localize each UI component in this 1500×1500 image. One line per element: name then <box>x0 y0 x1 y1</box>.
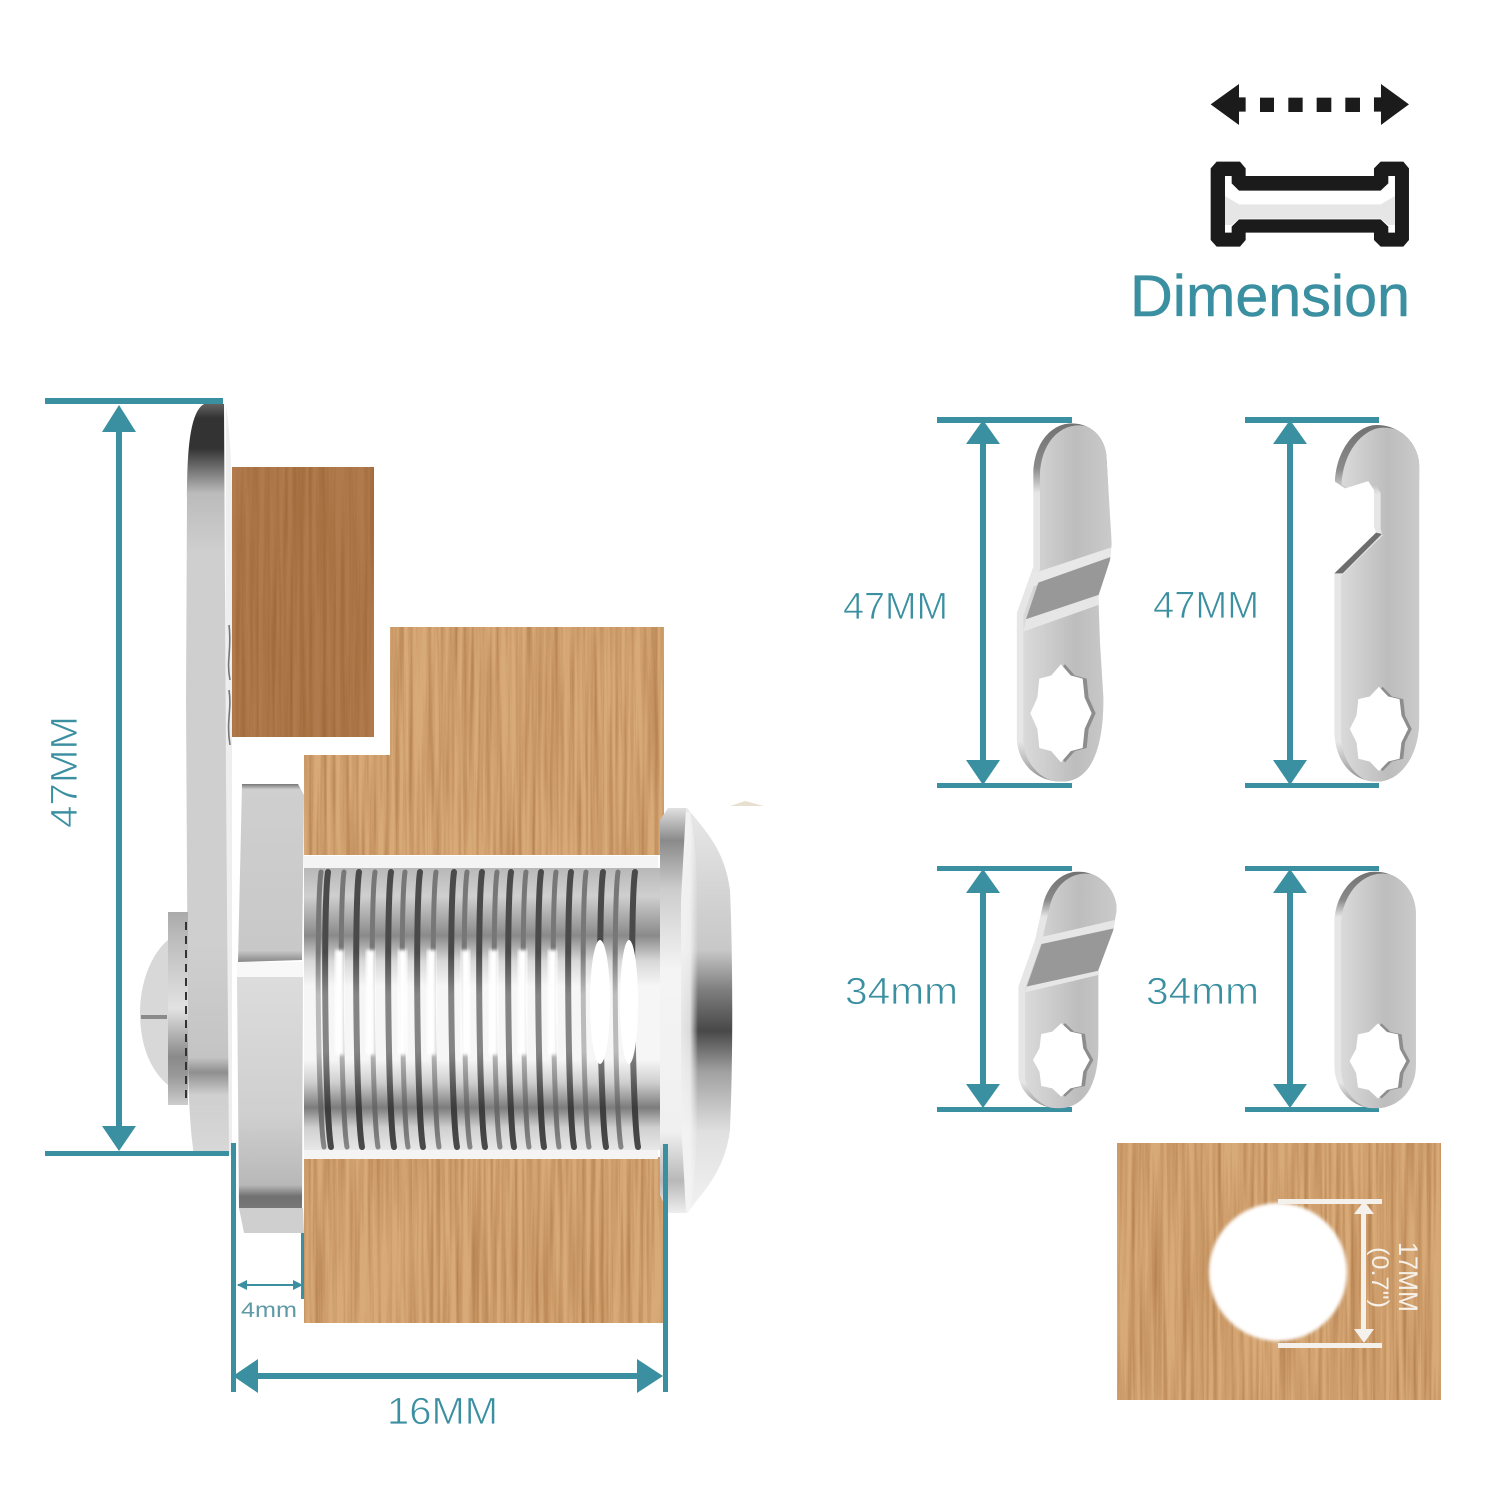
lock head <box>660 808 732 1213</box>
wood: darker cabinet piece <box>232 467 374 737</box>
barrel threads <box>318 872 638 1147</box>
lock barrel <box>304 856 660 1159</box>
dimension: lock height 47MM <box>44 398 229 1156</box>
dimension: 16MM depth <box>231 1143 668 1433</box>
label: 4mm: 4mm <box>241 1299 297 1322</box>
small stray mark <box>730 801 764 806</box>
wood: door panel <box>304 627 664 1323</box>
label: 17MM (0.7"): 17MM <box>1393 1242 1423 1312</box>
cam: short bent <box>1018 872 1117 1108</box>
panel: cam 3 with 34mm <box>845 866 1123 1112</box>
dimension lines <box>1245 417 1379 788</box>
hole dimension lines <box>1278 1199 1382 1348</box>
label: 17MM (0.7") <box>1366 1242 1423 1312</box>
label: 16MM: 16MM <box>387 1391 498 1433</box>
lock screw <box>140 912 188 1105</box>
dimension: 4mm nut thickness <box>237 1233 304 1322</box>
cam: bent <box>1016 423 1112 782</box>
dimension lines <box>1245 866 1379 1112</box>
label: 17MM (0.7"): (0.7") <box>1366 1247 1393 1308</box>
label: 34mm: 34mm <box>845 971 958 1013</box>
cam: straight <box>1334 872 1416 1108</box>
cam: hook <box>1334 425 1420 782</box>
highlights on thread <box>335 940 638 1064</box>
panel: drill hole 17MM <box>1117 1143 1441 1400</box>
heading: Dimension: Dimension <box>1130 264 1410 329</box>
icon: dog-bone bar <box>1211 162 1409 247</box>
hex nut <box>237 784 304 1233</box>
panel: lock installed in wood <box>140 404 764 1323</box>
panel: cam 2 hook with 47MM <box>1153 417 1426 788</box>
wood panel <box>1117 1143 1441 1400</box>
label: 34mm: 34mm <box>1146 971 1259 1013</box>
hole <box>1209 1203 1347 1341</box>
icon: dotted double arrow <box>1211 84 1409 125</box>
label: 47MM: 47MM <box>843 586 948 628</box>
cam plate side view <box>186 404 232 1155</box>
label: 47MM: 47MM <box>44 716 86 828</box>
panel: cam 4 with 34mm <box>1146 866 1423 1112</box>
label: 47MM: 47MM <box>1153 585 1259 627</box>
panel: cam 1 with 47MM <box>843 417 1118 788</box>
dimension lines <box>937 866 1072 1112</box>
icon: dimension arrows and bar <box>1211 84 1409 247</box>
dimension lines <box>937 417 1072 788</box>
